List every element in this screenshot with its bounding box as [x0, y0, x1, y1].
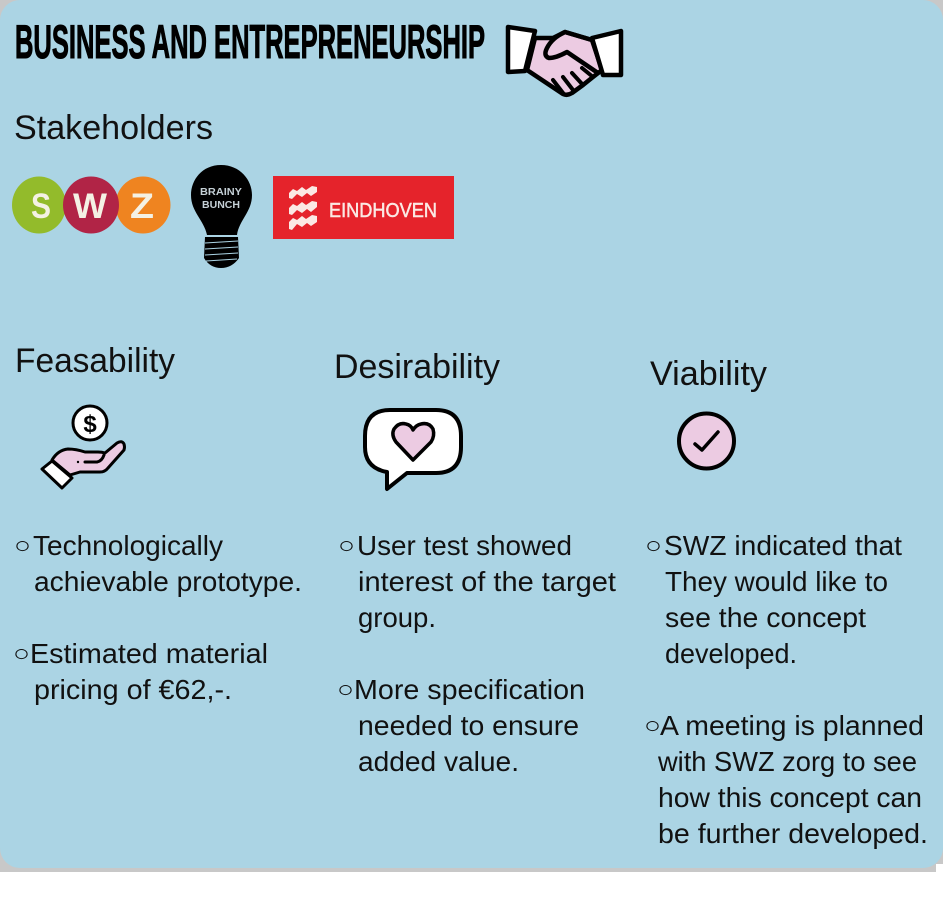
bullet list: viability: [644, 530, 928, 849]
bullet list: viability: A meeting is planned: [660, 710, 924, 741]
heading: desirability: Desirability: [334, 348, 500, 386]
icon: hand with coin: $: [83, 411, 97, 438]
icon: hand with coin: [42, 406, 124, 488]
heading: stakeholders: Stakeholders: [14, 109, 213, 147]
column: feasability: [13, 342, 302, 705]
logo: SWZ: S: [31, 187, 51, 226]
bullet list: feasability: Estimated material: [30, 638, 268, 669]
bullet list: desirability: More specification: [354, 674, 585, 705]
logo: SWZ: W: [73, 187, 107, 226]
bullet list: desirability: ○: [337, 676, 354, 702]
bullet list: desirability: added value.: [358, 746, 519, 777]
icon: speech bubble with heart: [365, 410, 461, 489]
bullet list: viability: ○: [645, 532, 662, 558]
heading: feasability: Feasability: [15, 342, 175, 380]
bullet list: feasability: ○: [14, 532, 31, 558]
logo: Brainy Bunch bulb: BUNCH: [202, 200, 240, 211]
bullet list: viability: SWZ indicated that: [664, 530, 902, 561]
bullet list: feasability: Technologically: [33, 530, 223, 561]
logo: SWZ: [12, 176, 170, 234]
logo: Brainy Bunch bulb: BRAINY: [200, 187, 242, 198]
bullet list: desirability: interest of the target: [358, 566, 616, 597]
bullet list: viability: developed.: [665, 638, 797, 669]
bullet list: desirability: User test showed: [357, 530, 572, 561]
bullet list: viability: ○: [644, 712, 661, 738]
column: viability: [644, 355, 928, 849]
bullet list: feasability: achievable prototype.: [34, 566, 302, 597]
bullet list: viability: how this concept can: [658, 782, 922, 813]
logo: SWZ: Z: [130, 187, 154, 226]
logo: Eindhoven: EINDHOVEN: [329, 200, 437, 222]
bullet list: viability: with SWZ zorg to see: [657, 746, 917, 777]
bullet list: feasability: pricing of €62,-.: [34, 674, 232, 705]
icon: handshake: [508, 27, 621, 95]
bullet list: viability: be further developed.: [658, 818, 928, 849]
logo: Brainy Bunch bulb: [191, 165, 252, 268]
icon: check circle: [679, 414, 734, 468]
title: BUSINESS AND ENTREPRENEURSHIP: [15, 15, 485, 68]
bullet list: desirability: needed to ensure: [358, 710, 579, 741]
bullet list: desirability: [337, 530, 616, 777]
bullet list: viability: They would like to: [665, 566, 888, 597]
bullet list: feasability: [13, 530, 302, 705]
column: desirability: [334, 348, 616, 777]
bullet list: desirability: group.: [358, 602, 436, 633]
logo: Eindhoven: [273, 176, 454, 239]
bullet list: feasability: ○: [13, 640, 30, 666]
bullet list: desirability: ○: [338, 532, 355, 558]
heading: viability: Viability: [650, 355, 767, 393]
bullet list: viability: see the concept: [665, 602, 866, 633]
